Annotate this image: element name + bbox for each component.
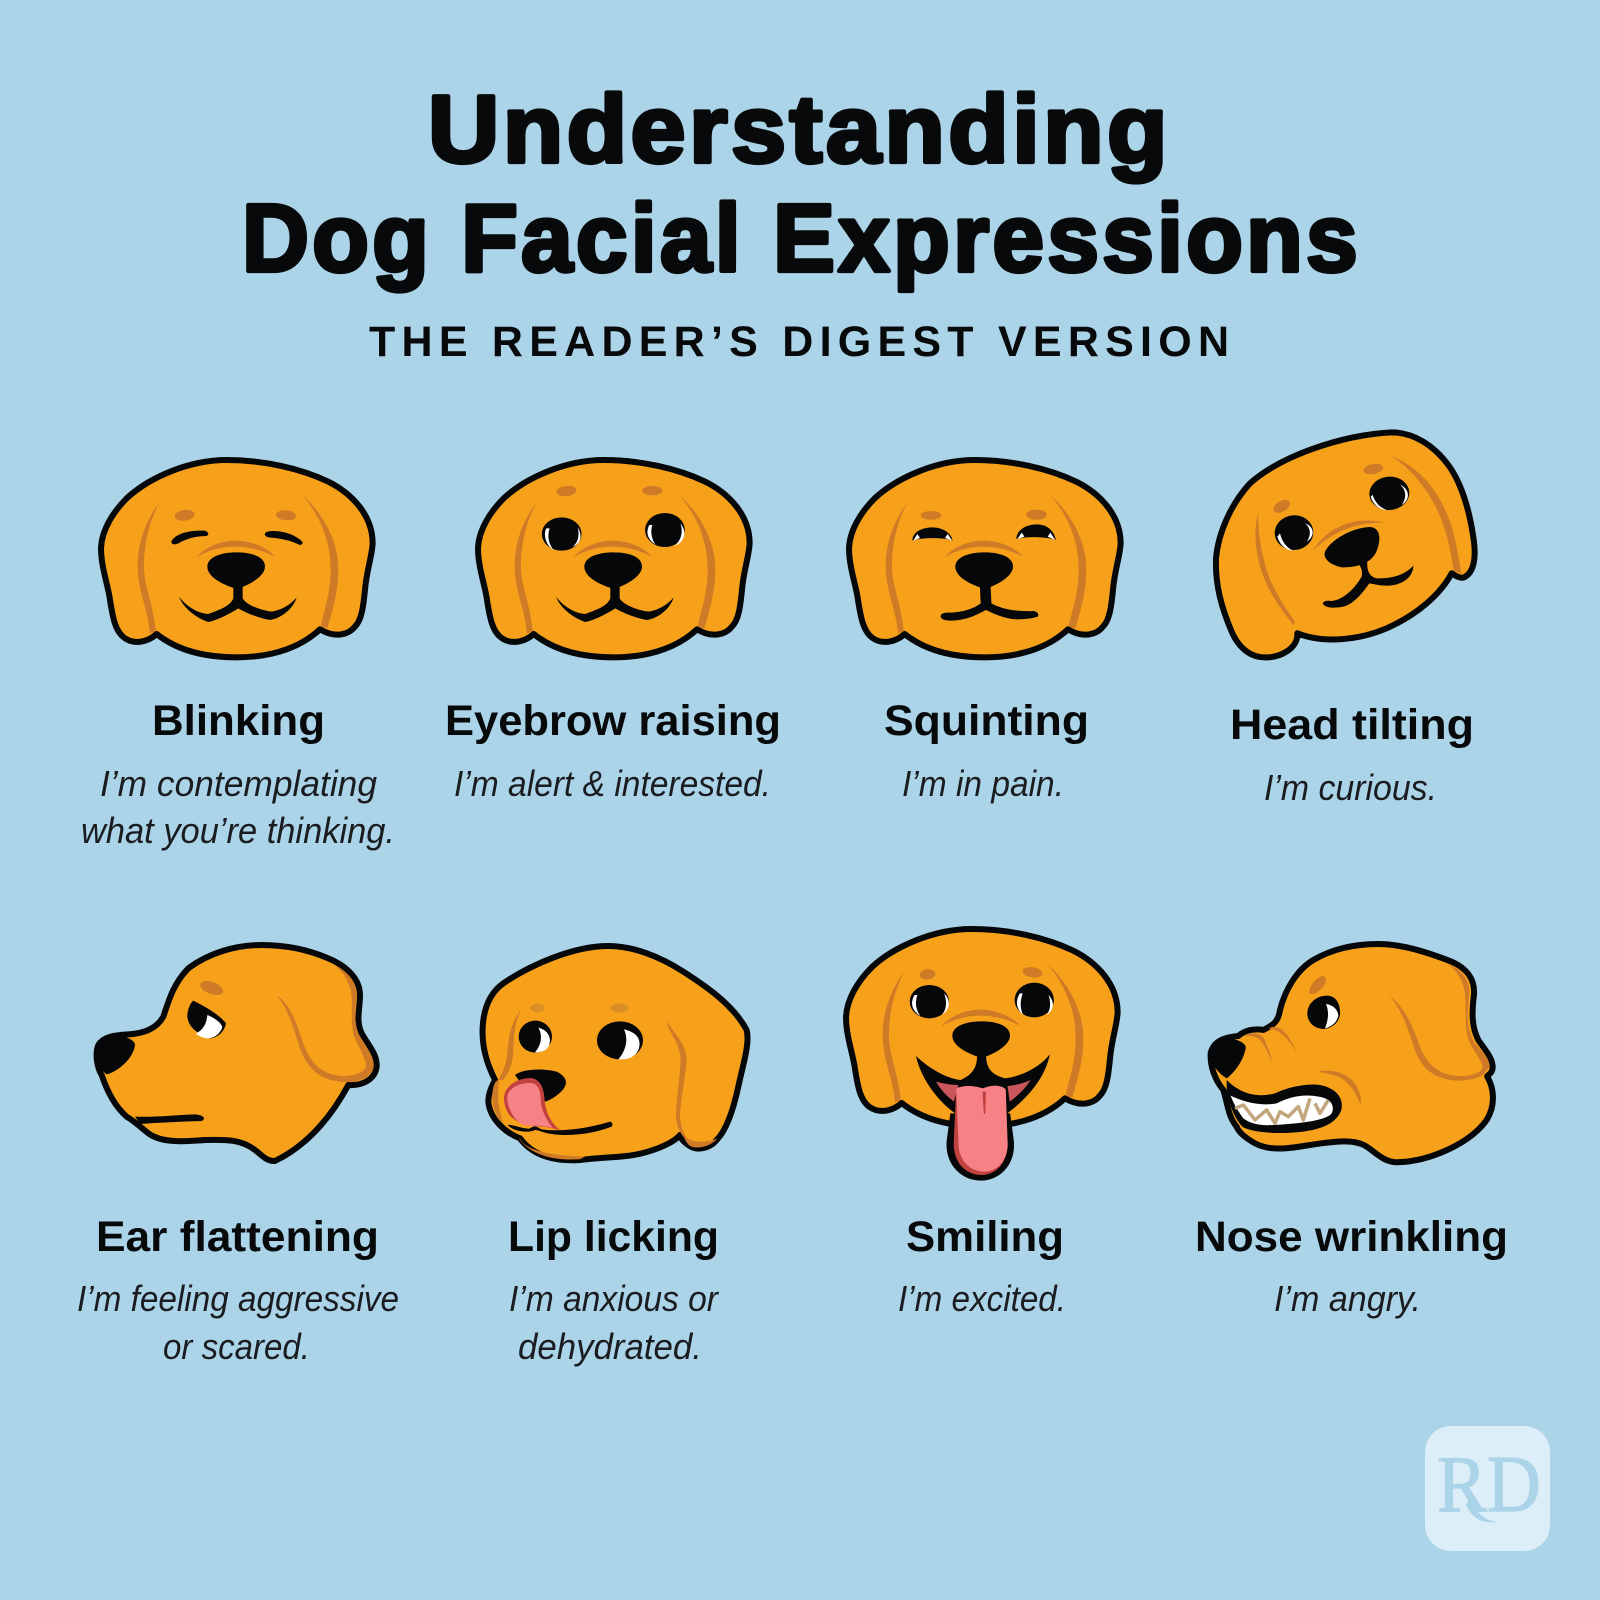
caption: head tilting: [1230, 701, 1474, 808]
caption: lip licking: Lip licking: [508, 1213, 719, 1261]
caption: blinking: I’m contemplating: [100, 763, 377, 804]
caption: blinking: [81, 697, 395, 851]
caption: nose wrinkling: Nose wrinkling: [1195, 1213, 1508, 1261]
caption: smiling: Smiling: [906, 1213, 1064, 1261]
logo: RD badge: [1425, 1426, 1550, 1551]
dog: ear flattening: [96, 945, 377, 1161]
caption: ear flattening: I’m feeling aggressive: [77, 1278, 399, 1319]
caption: lip licking: dehydrated.: [518, 1326, 702, 1367]
caption: blinking: what you’re thinking.: [81, 810, 395, 851]
title: Dog Facial Expressions: [242, 185, 1361, 292]
caption: head tilting: I’m curious.: [1264, 767, 1437, 808]
caption: nose wrinkling: [1195, 1213, 1508, 1319]
caption: lip licking: I’m anxious or: [509, 1278, 720, 1319]
caption: ear flattening: or scared.: [163, 1326, 310, 1367]
caption: smiling: I’m excited.: [898, 1278, 1066, 1319]
caption: eyebrow raising: Eyebrow raising: [445, 697, 781, 745]
caption: squinting: [884, 697, 1089, 804]
dog: smiling: [846, 929, 1118, 1181]
dog: squinting: [849, 460, 1121, 657]
logo: RD badge: RD: [1437, 1441, 1541, 1529]
subtitle: THE READER’S DIGEST VERSION: [369, 318, 1229, 366]
title: Understanding: [428, 76, 1171, 183]
caption: smiling: [898, 1213, 1066, 1319]
caption: squinting: I’m in pain.: [902, 763, 1064, 804]
dog: blinking: [101, 460, 373, 657]
dog: head tilting: [1216, 432, 1475, 657]
caption: eyebrow raising: [445, 697, 781, 804]
title: [242, 76, 1361, 292]
caption: eyebrow raising: I’m alert & interested.: [454, 763, 771, 804]
caption: squinting: Squinting: [884, 697, 1089, 745]
caption: ear flattening: Ear flattening: [96, 1213, 379, 1261]
caption: nose wrinkling: I’m angry.: [1274, 1278, 1421, 1319]
caption: blinking: Blinking: [152, 697, 325, 745]
dog: nose wrinkling: [1210, 944, 1493, 1162]
caption: ear flattening: [77, 1213, 399, 1367]
caption: head tilting: Head tilting: [1230, 701, 1474, 749]
dog: lip licking: [483, 946, 748, 1160]
caption: lip licking: [508, 1213, 720, 1367]
dog: eyebrow raising: [478, 460, 750, 657]
